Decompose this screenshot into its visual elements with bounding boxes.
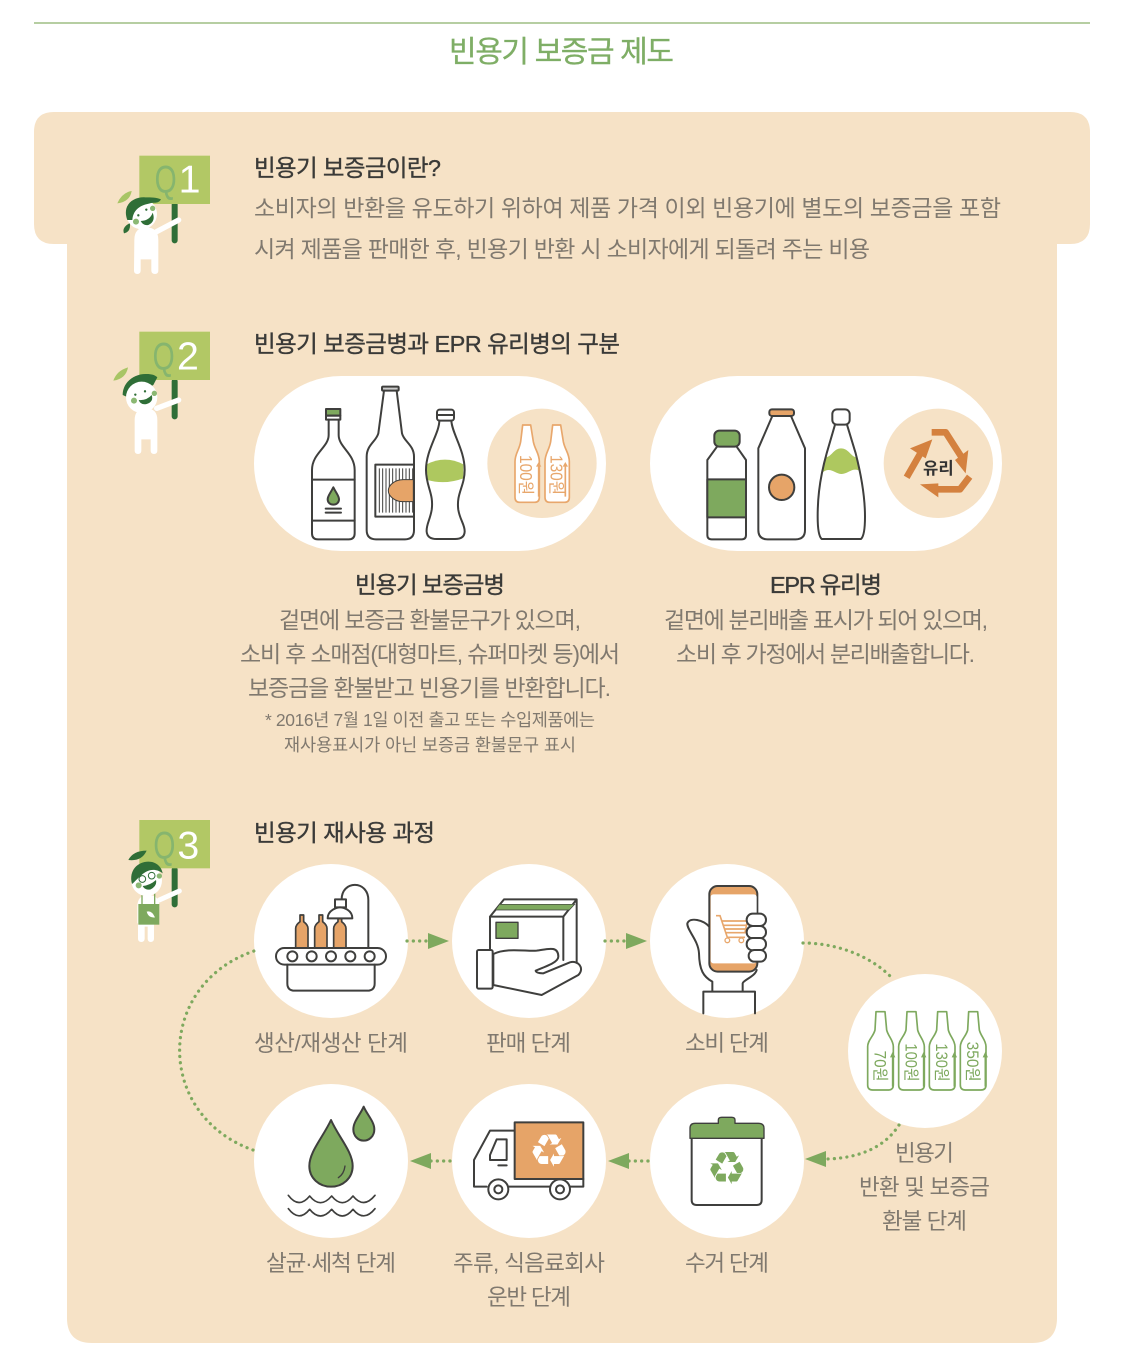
step: sterilization <box>254 1084 408 1276</box>
Q3 sign with character: 3 <box>177 823 199 867</box>
icon: water drops <box>288 1107 375 1216</box>
step: consumption <box>650 864 804 1056</box>
arrow: collection to transport <box>608 1153 651 1169</box>
Q1 body text: 시켜 제품을 판매한 후, 빈용기 반환 시 소비자에게 되돌려 주는 비용 <box>254 236 870 262</box>
description: deposit bottle: 소비 후 소매점(대형마트, 슈퍼마켓 등)에서 <box>240 641 620 667</box>
label: transport: 주류, 식음료회사 <box>453 1251 605 1276</box>
label: refund: 빈용기 <box>895 1141 954 1166</box>
icon: glass recycling mark: 유리 <box>923 459 954 478</box>
Q3 sign with character: Q <box>153 824 175 868</box>
description: deposit bottle: 보증금을 환불받고 빈용기를 반환합니다. <box>248 675 611 701</box>
arrow: sales to consumption <box>605 933 647 949</box>
Q3 sign with character <box>128 820 210 942</box>
label: transport <box>453 1251 605 1310</box>
description: deposit bottle <box>240 607 620 701</box>
icon: conveyor with bottles <box>276 885 386 991</box>
step: sales <box>452 864 606 1056</box>
arrow: production to sales <box>407 933 449 949</box>
step: transport <box>452 1084 606 1310</box>
icon: four priced bottles: 100원 <box>901 1043 920 1082</box>
label: transport: 운반 단계 <box>487 1285 571 1310</box>
section: Q3 <box>128 820 1002 1310</box>
icon: hand holding box <box>477 899 581 995</box>
icon: deposit price circle <box>487 409 597 518</box>
arrow: consumption to refund <box>803 943 892 978</box>
label: production: 생산/재생산 단계 <box>254 1031 408 1056</box>
Q1 body text <box>254 195 1001 262</box>
icon: three deposit bottles <box>312 387 465 539</box>
subheading: EPR bottle: EPR 유리병 <box>770 572 882 598</box>
icon: glass recycling mark <box>884 409 993 518</box>
subheading: deposit bottle: 빈용기 보증금병 <box>355 572 505 598</box>
step: refund <box>848 974 1002 1234</box>
Q1 sign with character: 1 <box>179 158 201 202</box>
title: 빈용기 보증금 제도 <box>449 36 674 69</box>
label: sterilization: 살균·세척 단계 <box>266 1251 396 1276</box>
icon: recycling truck: ♻ <box>529 1125 569 1178</box>
description: EPR bottle: 겉면에 분리배출 표시가 되어 있으며, <box>664 607 988 633</box>
panel: EPR glass bottles <box>650 376 1002 667</box>
icon: four priced bottles: 350원 <box>963 1042 982 1082</box>
label: collection: 수거 단계 <box>685 1251 769 1276</box>
icon: three EPR bottles <box>707 409 865 539</box>
arrow: transport to sterilization <box>410 1153 453 1169</box>
label: consumption: 소비 단계 <box>685 1031 769 1056</box>
icon: four priced bottles: 70원 <box>870 1051 889 1082</box>
Q1 sign with character: Q <box>155 158 177 202</box>
icon: deposit price circle: 130원 <box>547 455 567 495</box>
label: sales: 판매 단계 <box>486 1031 571 1056</box>
icon: deposit price circle: 100원 <box>516 455 536 495</box>
icon: recycling bin <box>690 1117 764 1205</box>
description: deposit bottle: 겉면에 보증금 환불문구가 있으며, <box>279 607 581 633</box>
Q2 sign with character <box>113 332 210 454</box>
Q2 sign with character: Q <box>153 335 175 379</box>
step: collection <box>650 1084 804 1276</box>
label: refund: 환불 단계 <box>882 1209 967 1234</box>
label: refund <box>859 1141 990 1234</box>
panel: deposit bottles <box>240 376 620 755</box>
section: Q2 <box>113 331 1002 755</box>
icon: recycling truck <box>474 1122 583 1199</box>
icon: four priced bottles <box>868 1012 988 1090</box>
footnote <box>265 710 595 755</box>
Q1 heading: 빈용기 보증금이란? <box>254 155 441 181</box>
Q2 sign with character: 2 <box>177 334 199 378</box>
Q1 body text: 소비자의 반환을 유도하기 위하여 제품 가격 이외 빈용기에 별도의 보증금을 포함 <box>254 195 1001 221</box>
icon: hand holding phone with cart <box>687 886 766 1013</box>
description: EPR bottle: 소비 후 가정에서 분리배출합니다. <box>676 641 975 667</box>
arrow: sterilization back to production <box>180 951 254 1150</box>
description: EPR bottle <box>664 607 988 667</box>
Q1 sign with character <box>117 156 210 274</box>
arrow: refund to collection <box>805 1125 899 1167</box>
Q3 heading: 빈용기 재사용 과정 <box>254 820 435 846</box>
icon: recycling bin: ♻ <box>706 1142 747 1195</box>
step: production <box>254 864 408 1056</box>
label: refund: 반환 및 보증금 <box>859 1175 990 1200</box>
section: Q1 <box>117 155 1001 274</box>
Q2 heading: 빈용기 보증금병과 EPR 유리병의 구분 <box>254 331 620 357</box>
footnote: 재사용표시가 아닌 보증금 환불문구 표시 <box>284 735 576 755</box>
icon: four priced bottles: 130원 <box>932 1043 951 1082</box>
footnote: * 2016년 7월 1일 이전 출고 또는 수입제품에는 <box>265 710 595 730</box>
